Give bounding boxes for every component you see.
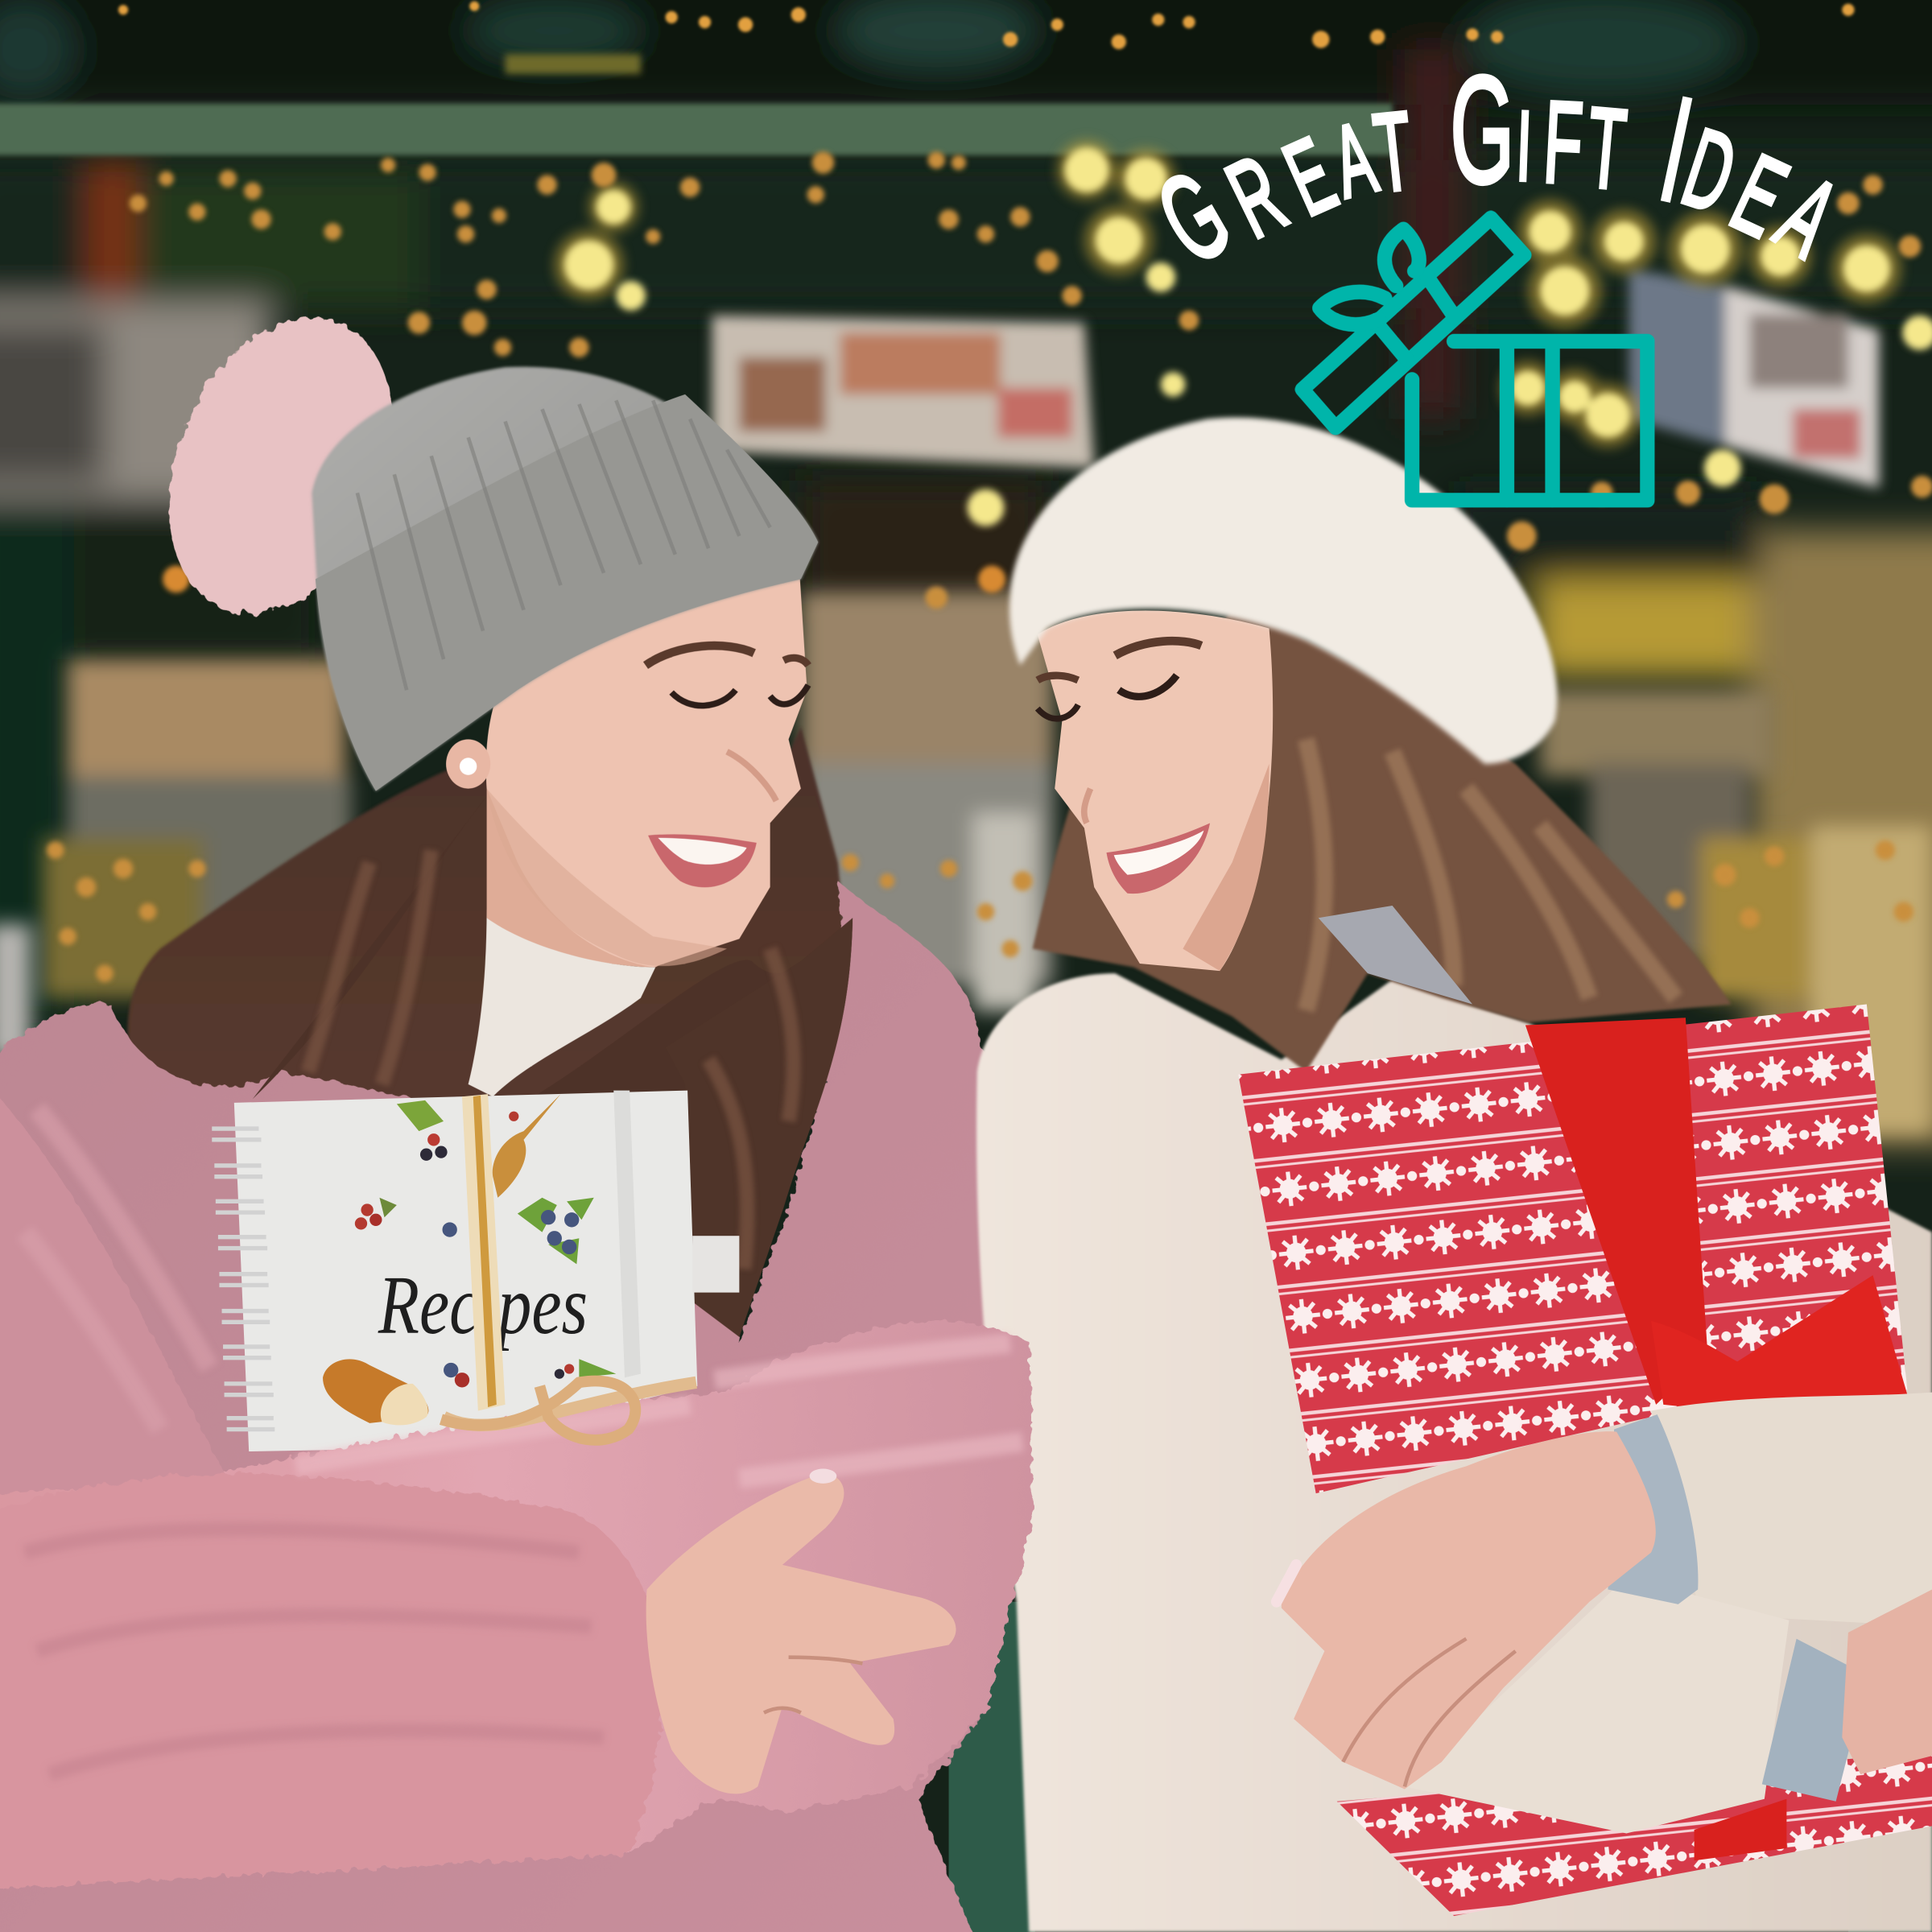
lights: bokeh — [47, 2, 1932, 982]
heading: great gift idea: A — [1323, 101, 1386, 219]
face left — [446, 555, 808, 968]
heading: great gift idea: I — [1515, 90, 1534, 201]
sign: right banner — [1629, 269, 1879, 488]
person: left woman — [0, 284, 1033, 1932]
hair right — [1033, 610, 1732, 1072]
shelves: market goods — [0, 592, 1932, 1133]
neck — [487, 776, 690, 968]
floor: green ground — [949, 1602, 1932, 1932]
heading: great gift idea: I — [1649, 65, 1705, 233]
gift box — [1238, 1004, 1932, 1916]
icon: open gift box — [1302, 218, 1647, 500]
heading: great gift idea: E — [1715, 132, 1803, 261]
title: Recipes: Recipes — [378, 1258, 588, 1352]
pom pom — [127, 284, 435, 647]
coat right — [976, 973, 1932, 1932]
eyes and brows — [646, 646, 754, 666]
eyes and brows — [1115, 641, 1201, 655]
hands right — [1277, 1431, 1932, 1789]
heading: great gift idea: G — [1137, 146, 1251, 290]
heading: great gift idea: R — [1211, 133, 1302, 262]
mouth — [1106, 823, 1210, 894]
scarf — [1319, 906, 1472, 1004]
fork — [493, 1094, 560, 1198]
heading: great gift idea — [1137, 45, 1857, 290]
ribbon vertical — [462, 1094, 506, 1411]
notebook: recipes — [212, 1091, 739, 1451]
ear and earring — [446, 739, 490, 789]
face right — [1038, 611, 1273, 971]
turtleneck — [469, 910, 655, 1096]
sign: center banner — [712, 316, 1094, 469]
hat — [127, 284, 818, 791]
coat left — [0, 881, 1033, 1932]
mouth — [648, 834, 757, 887]
ribbon bow — [441, 1381, 696, 1440]
cover — [234, 1091, 697, 1451]
sleeves right — [1405, 1393, 1932, 1834]
bread — [323, 1359, 428, 1425]
hair strands over coat — [253, 789, 852, 1337]
heading: great gift idea: E — [1269, 116, 1351, 238]
heading: great gift idea: F — [1541, 76, 1586, 208]
elastic band — [613, 1091, 641, 1377]
coat: left woman foreground arm — [0, 1047, 1033, 1891]
bar: green awning beam — [0, 104, 1393, 155]
heading: great gift idea: T — [1583, 84, 1631, 213]
bow — [1385, 229, 1419, 286]
hand left — [646, 1468, 956, 1794]
lid — [1302, 218, 1524, 427]
spiral binding — [212, 1129, 275, 1430]
person: right woman — [976, 417, 1932, 1932]
ribbon — [1525, 1018, 1707, 1405]
heading: great gift idea: A — [1758, 155, 1857, 280]
heading: great gift idea: T — [1368, 89, 1418, 216]
pen tab — [692, 1236, 739, 1293]
box — [1412, 341, 1647, 500]
hair back left — [128, 727, 850, 1319]
heading: great gift idea: G — [1450, 45, 1514, 216]
berries — [355, 1100, 616, 1387]
beret — [1009, 417, 1557, 764]
heading: great gift idea: D — [1670, 106, 1749, 237]
